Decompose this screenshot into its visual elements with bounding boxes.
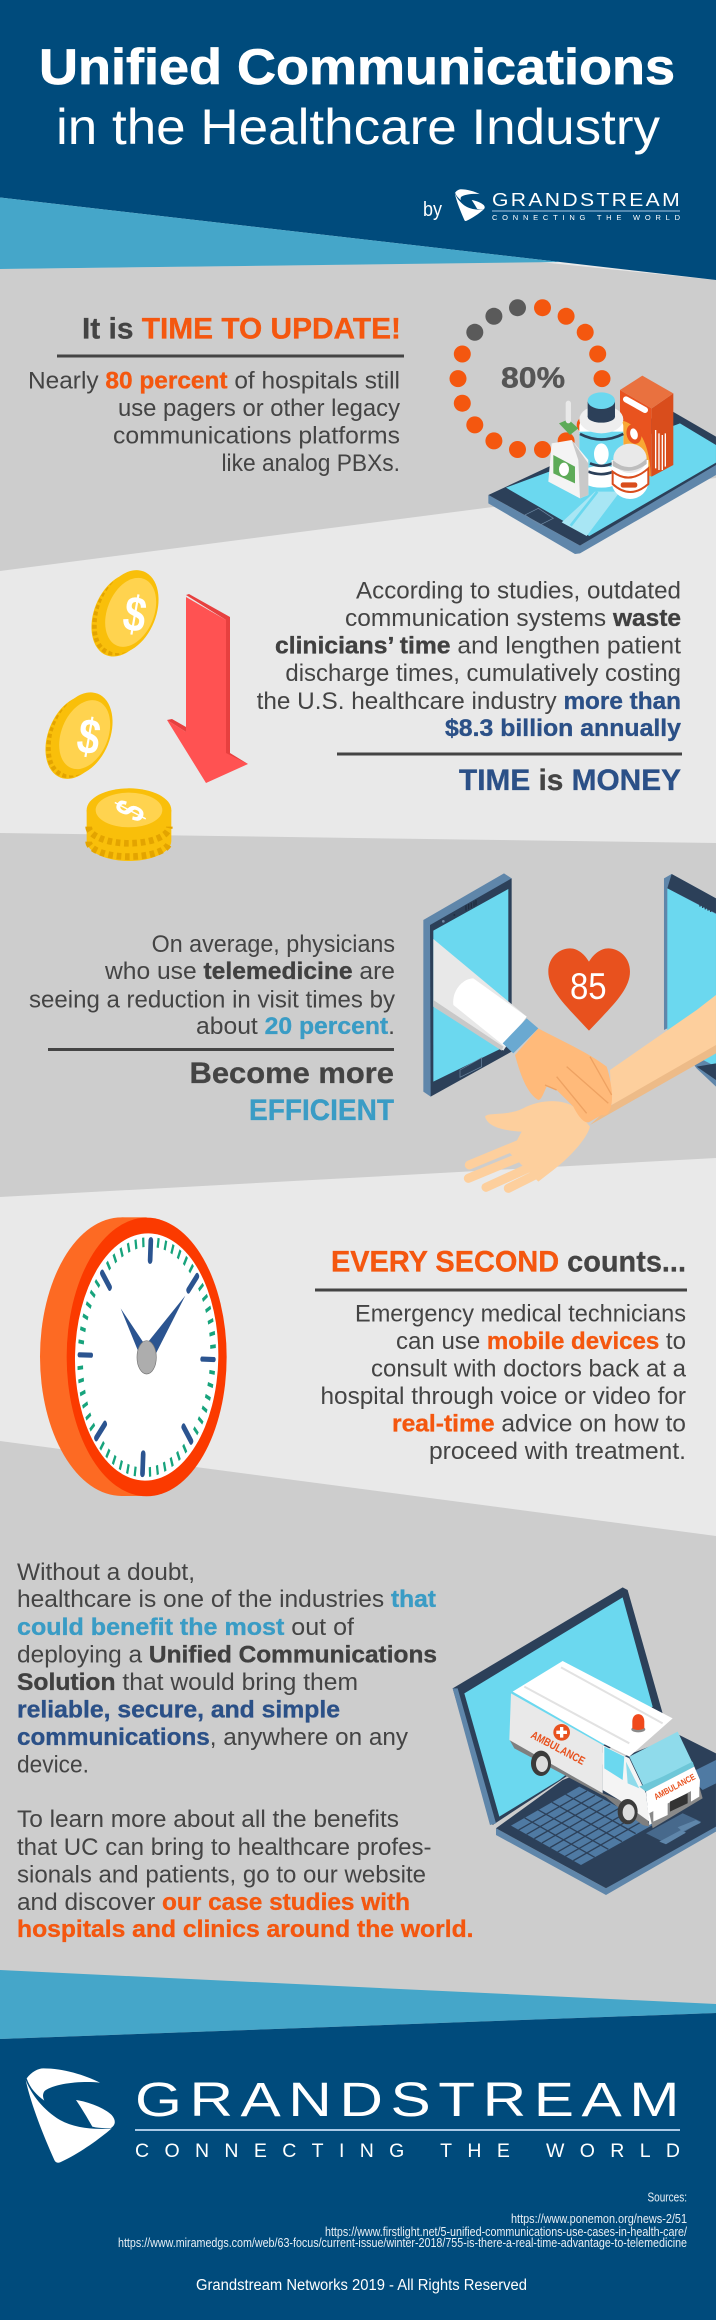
panel: telemedicine (29, 873, 716, 1188)
icon: ambulance: AMBULANCE (529, 1729, 587, 1768)
byline with small logo: GRANDSTREAM (492, 190, 682, 210)
text: 80 percent of hospitals: Nearly 80 percent of hospitals still (28, 368, 400, 395)
icon: clock hands (121, 1296, 185, 1374)
icon: doctor sleeve (433, 939, 538, 1053)
text: 80 percent of hospitals: use pagers or other legacy (118, 395, 401, 422)
icon: grandstream shield (26, 2068, 115, 2163)
text: healthcare benefit paragraph: reliable, secure, and simple (17, 1697, 340, 1724)
icon: right tablet (664, 874, 716, 1087)
logo: grandstream: GRANDSTREAM (135, 2074, 687, 2127)
text: healthcare benefit paragraph (17, 1559, 437, 1779)
text: waste of clinicians time: discharge times, cumulatively costing (285, 660, 681, 687)
text: telemedicine reduction: about 20 percent. (196, 1013, 395, 1040)
text: emergency medical technicians: proceed with treatment. (429, 1438, 686, 1465)
heading: time to update: It is TIME TO UPDATE! (82, 312, 401, 346)
title (39, 39, 675, 155)
heading: become more efficient (190, 1057, 394, 1127)
text: learn more paragraph: sionals and patients, go to our website (17, 1862, 426, 1889)
icon: heart rate 85 (548, 948, 630, 1031)
icon: wall clock (40, 1217, 227, 1496)
text: healthcare benefit paragraph: communications, anywhere on any (17, 1724, 409, 1751)
text: telemedicine reduction: On average, physicians (152, 931, 395, 958)
icon: ambulance: AMBULANCE (652, 1772, 697, 1802)
logo: grandstream (26, 2068, 687, 2163)
panel: time to update (28, 299, 716, 554)
icon: coin stack: $ (105, 793, 155, 828)
header band (0, 0, 716, 280)
text: healthcare benefit paragraph: deploying a Unified Communications (17, 1642, 437, 1669)
text: sources (118, 2191, 687, 2250)
icon: coin two (34, 683, 124, 788)
title: in the Healthcare Industry (56, 99, 660, 155)
icon: coin two: $ (73, 707, 105, 766)
text: learn more paragraph: and discover our case studies with (17, 1889, 410, 1916)
text: emergency medical technicians: Emergency medical technicians (355, 1301, 686, 1328)
title: Unified Communications (39, 39, 675, 95)
icon: coin stack (87, 788, 171, 861)
text: 80 percent of hospitals: like analog PBXs. (222, 450, 400, 477)
text: waste of clinicians time: the U.S. healthcare industry more than (257, 688, 681, 715)
text: sources: https://www.ponemon.org/news-2/51 (511, 2212, 687, 2226)
icon: coin one (80, 561, 170, 666)
text: healthcare benefit paragraph: Solution that would bring them (17, 1669, 358, 1696)
panel: conclusion (17, 1559, 716, 1943)
heading: every second counts: EVERY SECOND counts... (331, 1246, 686, 1279)
text: emergency medical technicians (320, 1301, 686, 1465)
text: emergency medical technicians: can use mobile devices to (396, 1328, 686, 1355)
text: emergency medical technicians: hospital through voice or video for (320, 1383, 686, 1410)
text: learn more paragraph (17, 1806, 474, 1943)
icon: tablet with medicine (488, 376, 716, 554)
chart: clock ticks (73, 1235, 220, 1480)
logo: grandstream: CONNECTING THE WORLD (135, 2140, 680, 2162)
text: healthcare benefit paragraph: device. (17, 1752, 89, 1779)
icon: open hand (468, 1101, 590, 1188)
text: waste of clinicians time: clinicians’ time and lengthen patient (275, 633, 681, 660)
icon: laptop (453, 1587, 716, 1895)
footer band (0, 1970, 716, 2320)
byline with small logo (423, 189, 682, 222)
text: healthcare benefit paragraph: Without a doubt, (17, 1559, 195, 1586)
text: waste of clinicians time: communication systems waste (345, 605, 681, 632)
text: healthcare benefit paragraph: healthcare is one of the industries that (17, 1586, 436, 1613)
text: telemedicine reduction: who use telemedicine are (104, 958, 395, 985)
icon: laptop with ambulance (453, 1587, 716, 1895)
text: copyright: Grandstream Networks 2019 - All Rights Reserved (196, 2277, 527, 2294)
text: sources: Sources: (648, 2191, 687, 2205)
text: learn more paragraph: To learn more about all the benefits (17, 1806, 399, 1833)
panel: time is money (34, 561, 682, 861)
text: telemedicine reduction (29, 931, 396, 1040)
heading: become more efficient: Become more (190, 1057, 394, 1090)
icon: heart rate 85: 85 (570, 965, 607, 1007)
panel: every second counts (40, 1217, 687, 1496)
text: telemedicine reduction: seeing a reduction in visit times by (29, 986, 396, 1014)
icon: coin one: $ (119, 584, 151, 644)
heading: become more efficient: EFFICIENT (249, 1094, 394, 1127)
icon: telemedicine tablets and hands (423, 873, 716, 1188)
byline with small logo: by (423, 199, 442, 221)
icon: patient arm (590, 995, 716, 1125)
text: emergency medical technicians: real-time advice on how to (392, 1411, 686, 1438)
text: learn more paragraph: hospitals and clinics around the world. (17, 1916, 474, 1943)
arrow: falling red arrow (167, 594, 248, 783)
heading: time is money: TIME is MONEY (459, 764, 681, 797)
icon: falling coins (34, 561, 171, 861)
text: waste of clinicians time (257, 578, 681, 742)
chart: 80 percent dot ring (450, 299, 610, 458)
text: waste of clinicians time: According to studies, outdated (356, 578, 681, 604)
chart: 80 percent dot ring: 80% (501, 362, 565, 394)
icon: left tablet (423, 873, 512, 1097)
icon: ambulance (509, 1661, 703, 1828)
text: healthcare benefit paragraph: could benefit the most out of (17, 1614, 354, 1641)
text: 80 percent of hospitals: communications platforms (113, 422, 400, 450)
icon: doctor hand (515, 1028, 612, 1122)
text: 80 percent of hospitals (28, 368, 401, 477)
text: emergency medical technicians: consult with doctors back at a (371, 1356, 686, 1383)
text: learn more paragraph: that UC can bring to healthcare profes- (17, 1834, 432, 1861)
text: waste of clinicians time: $8.3 billion annually (445, 715, 681, 742)
byline with small logo: CONNECTING THE WORLD (492, 213, 681, 222)
